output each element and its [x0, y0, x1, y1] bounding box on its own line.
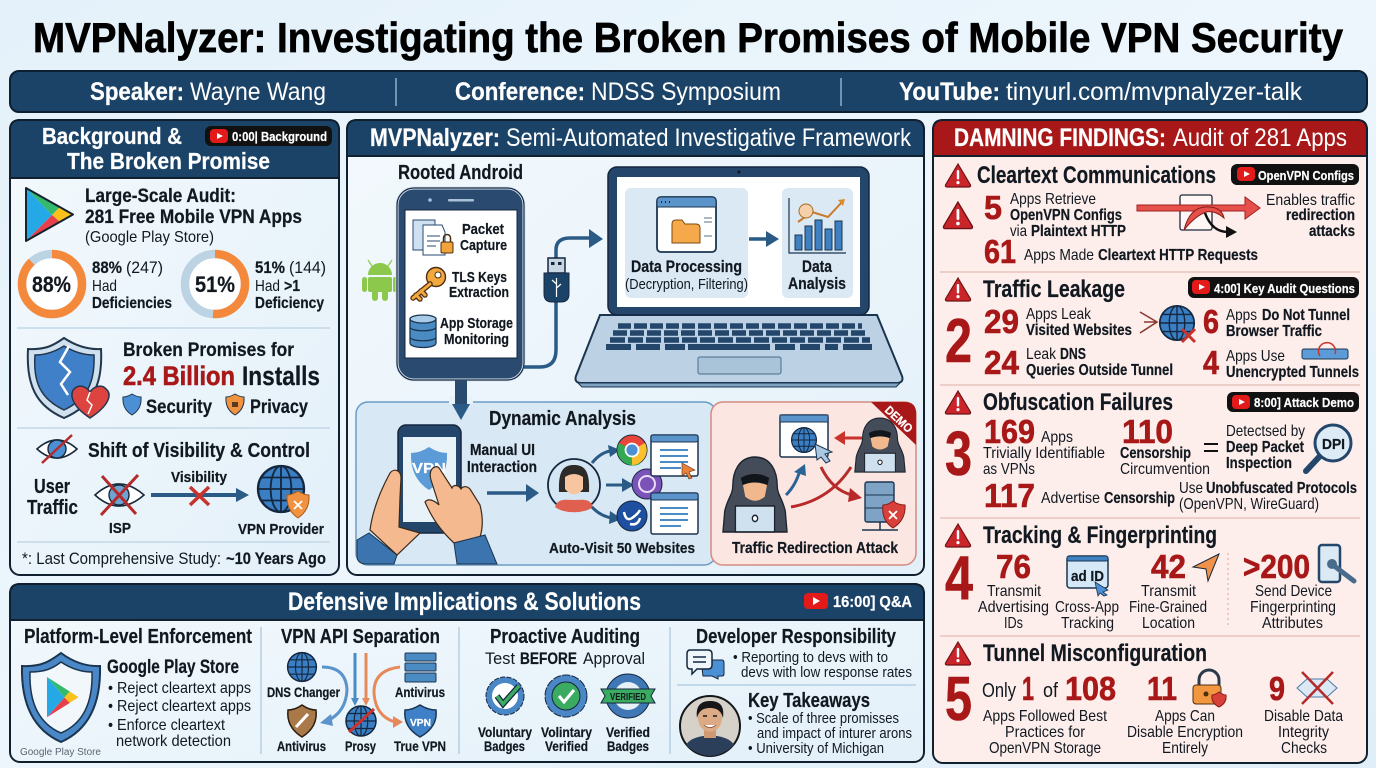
icon: crossed integrity check: [1297, 672, 1337, 704]
stat: 9 disable integrity: Disable Data: [1264, 708, 1343, 725]
bullet list: [107, 657, 251, 750]
timestamp pill: 8:00] Attack Demo: [1254, 395, 1354, 410]
talk info bar: NDSS Symposium: [591, 78, 781, 106]
text: deep packet inspection: Inspection: [1226, 455, 1292, 472]
heading: Semi-Automated Investigative Framework: [506, 124, 911, 152]
icon: warning: [945, 391, 971, 414]
icon: broken shield with heart: [28, 338, 109, 418]
video timestamp pill: 0:00| Background: [232, 129, 327, 144]
arrow: visibility blocked: Visibility: [171, 469, 228, 486]
footnote: ~10 Years Ago: [226, 550, 326, 568]
heading: [42, 123, 270, 174]
icon: ad ID: [1067, 556, 1108, 596]
stat: 11 apps: 11: [1147, 670, 1177, 707]
stat: 42 location: Fine-Grained: [1129, 599, 1207, 616]
stat: 24 DNS: DNS: [1060, 346, 1086, 363]
timestamp pill: [1231, 164, 1359, 185]
column: proactive auditing: [478, 626, 655, 754]
badge: voluntary badges: Voluntary: [478, 724, 532, 740]
timestamp: [804, 593, 912, 611]
icon: TLS key: [413, 268, 446, 299]
manual UI interaction label: Manual UI: [470, 442, 535, 459]
icon: antivirus shield brown: [277, 705, 326, 754]
stat: 9 disable integrity: [1264, 670, 1343, 757]
column heading: Platform-Level Enforcement: [24, 626, 252, 648]
icon: warning: [945, 642, 971, 665]
TLS keys label: TLS Keys: [452, 269, 507, 286]
badge: verified badges: VERIFIED: [610, 692, 646, 703]
stat: over 200 fingerprinting: >200: [1243, 548, 1310, 585]
arrow: to person: [487, 484, 539, 502]
key takeaways: • University of Michigan: [748, 741, 884, 757]
website window one: [651, 435, 698, 479]
icon: phone with wrench: [1319, 545, 1354, 582]
section: tunnel misconfiguration: [945, 640, 1343, 757]
text: unobfuscated protocols: [1179, 480, 1357, 513]
bullet list: • Enforce cleartext: [108, 717, 225, 734]
stat: 117 censorship: Advertise: [1041, 490, 1100, 507]
broken promises text: [123, 340, 320, 391]
stat: 24 DNS: Leak: [1026, 346, 1057, 363]
icon: app storage database: [410, 315, 436, 348]
stat: 110 censorship: [1120, 413, 1210, 478]
icon: warning: [945, 164, 971, 187]
stat: 61 apps: [984, 233, 1258, 270]
section: obfuscation failures: [945, 389, 1359, 514]
illustration: config interception arrow: [1137, 195, 1260, 238]
stat: 4 apps unencrypted: Apps Use: [1226, 348, 1285, 365]
stat: 117 censorship: Censorship: [1104, 490, 1175, 507]
panel: background and the broken promise: [10, 120, 339, 575]
heading: shift of visibility: Shift of Visibility & Control: [88, 440, 310, 462]
column: developer responsibility: [677, 626, 916, 757]
talk info bar: Speaker:: [90, 78, 184, 106]
stat: 51 percent more than one deficiency: Deficiency: [255, 295, 324, 312]
text: deep packet inspection: Deep Packet: [1226, 439, 1305, 456]
laptop: [576, 167, 902, 387]
icon: antivirus shield brown: Antivirus: [277, 739, 326, 754]
text: enables traffic redirection: attacks: [1309, 223, 1355, 240]
badge: voluntary verified: [541, 675, 592, 754]
talk info bar: Conference:: [455, 78, 585, 106]
stat: 1 of 108: OpenVPN Storage: [989, 740, 1101, 757]
stat: 76 advertising IDs: Advertising: [978, 599, 1049, 616]
icon: server antivirus: [395, 653, 445, 700]
stat: 76 advertising IDs: [978, 548, 1049, 632]
stat: over 200 fingerprinting: Fingerprinting: [1250, 599, 1336, 616]
cross-app tracking label: Tracking: [1061, 615, 1114, 632]
stat: 61 apps: 61: [984, 233, 1016, 270]
icon: android robot: [362, 260, 397, 301]
stat: 29 apps: Visited Websites: [1026, 322, 1132, 339]
stat: 9 disable integrity: Checks: [1281, 740, 1327, 757]
heading: Defensive Implications & Solutions: [288, 588, 641, 616]
icon: lock with shield: [1193, 670, 1226, 707]
stat: 4 apps unencrypted: 4: [1203, 344, 1220, 381]
heading: DAMNING FINDINGS:: [954, 124, 1166, 152]
column: platform-level enforcement: [20, 626, 252, 758]
badge: verified badges: Badges: [607, 738, 649, 754]
stat: 6 apps: [1203, 303, 1350, 340]
stat: 88 percent deficiencies: (247): [126, 258, 163, 277]
cross-app tracking label: [1055, 599, 1119, 632]
timestamp pill: [1227, 392, 1359, 412]
privacy label: Privacy: [250, 397, 308, 418]
bullet list: network detection: [116, 733, 231, 750]
arrows: crossed redirection: [791, 467, 862, 507]
section heading: Tracking & Fingerprinting: [983, 522, 1217, 549]
bullet list: • Reject cleartext apps: [108, 680, 251, 697]
audit text: (Google Play Store): [85, 229, 214, 246]
stat: 9 disable integrity: 9: [1269, 670, 1285, 707]
stat: 1 of 108: Only: [982, 680, 1016, 702]
auto-visit label: Auto-Visit 50 Websites: [549, 540, 695, 557]
icon: true VPN shield: VPN: [410, 718, 431, 729]
packet capture label: [460, 221, 507, 254]
stat: 5 apps: [984, 189, 1126, 240]
text: deep packet inspection: [1226, 423, 1305, 472]
stat: 117 censorship: [984, 477, 1175, 514]
icon: blue browser: [617, 501, 647, 531]
stat: 24 DNS: [984, 344, 1173, 381]
audit text: 281 Free Mobile VPN Apps: [85, 207, 302, 228]
stat: 24 DNS: 24: [984, 344, 1020, 381]
rooted android heading: Rooted Android: [398, 162, 523, 184]
section number 3: 3: [945, 420, 972, 489]
stat: 29 apps: 29: [984, 303, 1019, 340]
section: cleartext communications: [943, 162, 1359, 270]
stat: 88 percent deficiencies: Deficiencies: [92, 295, 172, 312]
timestamp: 16:00] Q&A: [833, 594, 912, 611]
stat: 1 of 108: of: [1043, 680, 1058, 702]
audit text: Large-Scale Audit:: [85, 186, 236, 207]
key takeaways: [748, 690, 912, 757]
timestamp pill: [1188, 277, 1359, 298]
video timestamp pill: [205, 126, 332, 146]
section heading: Tunnel Misconfiguration: [983, 640, 1207, 667]
illustration: hands on VPN phone: VPN: [412, 460, 446, 477]
stat: 11 apps: Apps Can: [1155, 708, 1215, 725]
badge: voluntary verified: Verified: [545, 738, 588, 754]
panel: semi-automated investigative framework: [347, 120, 924, 575]
panel: damning findings: [933, 120, 1367, 763]
stat: 169 apps: [983, 413, 1105, 478]
broken promises text: 2.4 Billion: [123, 361, 235, 391]
icon: proxy globe: Prosy: [345, 739, 376, 754]
heading: Background &: [42, 123, 182, 149]
talk info bar: YouTube:: [899, 78, 1000, 106]
heading: Dynamic Analysis: [489, 408, 636, 430]
phone: rooted android: [397, 188, 524, 380]
heading: Audit of 281 Apps: [1173, 124, 1347, 152]
stat: 42 location: Location: [1142, 615, 1195, 632]
stat: 4 apps unencrypted: [1203, 344, 1359, 381]
data processing box: (Decryption, Filtering): [625, 276, 748, 293]
stat: 5 apps: Plaintext HTTP: [1031, 223, 1126, 240]
manual UI interaction label: [467, 442, 537, 476]
heading: MVPNalyzer:: [370, 124, 500, 152]
icon: ISP eye crossed: ISP: [109, 520, 131, 537]
text: unobfuscated protocols: (OpenVPN, WireGuard): [1179, 496, 1319, 513]
arrow: USB cable to laptop: [524, 229, 603, 367]
icon: ad ID: ad ID: [1071, 568, 1104, 585]
stat: 76 advertising IDs: Transmit: [987, 583, 1041, 600]
icon: warning: [945, 524, 971, 547]
icon: crossed eye: [37, 435, 77, 463]
stat: 88 percent deficiencies: [92, 258, 172, 312]
icon: purple browser: [632, 469, 662, 499]
text: enables traffic redirection: redirection: [1286, 207, 1355, 224]
photo: speaker portrait: [680, 696, 740, 756]
heading: [954, 124, 1347, 152]
badge: verified badges: Verified: [606, 724, 650, 740]
cross-app tracking label: Cross-App: [1055, 599, 1119, 616]
attack label: Traffic Redirection Attack: [732, 540, 898, 557]
TLS keys label: Extraction: [449, 284, 509, 301]
broken promises text: Broken Promises for: [123, 340, 295, 361]
column: VPN API separation: [267, 626, 446, 754]
badge: voluntary badges: Badges: [484, 738, 525, 754]
donut chart: 88 percent: [22, 254, 82, 314]
badge: voluntary badges: [478, 677, 532, 754]
user traffic label: Traffic: [27, 497, 78, 519]
stat: 6 apps: Apps: [1226, 307, 1257, 324]
stat: 169 apps: Trivially Identifiable: [983, 445, 1105, 462]
stat: 1 of 108: 1: [1022, 670, 1034, 707]
demo ribbon: DEMO: [882, 403, 916, 436]
stat: 110 censorship: Circumvention: [1120, 461, 1210, 478]
stat: 169 apps: as VPNs: [983, 461, 1035, 478]
stat: 1 of 108: [982, 670, 1116, 757]
packet capture label: Capture: [460, 237, 507, 254]
data processing box: [625, 188, 748, 298]
stat: 29 apps: [984, 303, 1132, 340]
broken promises text: Installs: [242, 361, 320, 391]
stat: over 200 fingerprinting: Attributes: [1262, 615, 1323, 632]
section number 4: 4: [945, 544, 973, 613]
icon: DPI magnifier: DPI: [1322, 436, 1345, 453]
icon: person: [548, 459, 600, 512]
reporting text: • Reporting to devs with to: [733, 650, 888, 666]
arrow: visibility blocked: [151, 469, 249, 505]
bullet list: • Reject cleartext apps: [108, 698, 251, 715]
column heading: VPN API Separation: [281, 626, 440, 648]
stat: 51 percent more than one deficiency: [255, 258, 326, 312]
column heading: [485, 626, 645, 668]
icon: warning large: [943, 202, 972, 229]
talk info bar: tinyurl.com/mvpnalyzer-talk: [1006, 78, 1302, 106]
text: enables traffic redirection: [1266, 192, 1355, 240]
icon: VPN provider globe: VPN Provider: [238, 521, 324, 538]
packet capture label: Packet: [462, 221, 504, 238]
user traffic label: [27, 476, 78, 519]
donut chart: 88 percent: 88%: [32, 272, 71, 297]
stat: 1 of 108: Apps Followed Best: [983, 708, 1107, 725]
heading: [370, 124, 911, 152]
equals sign: [1204, 444, 1218, 451]
icon: chat bubbles: [687, 650, 724, 679]
text: unobfuscated protocols: Use: [1179, 480, 1203, 497]
app storage label: [440, 315, 513, 348]
stat: over 200 fingerprinting: Send Device: [1255, 583, 1332, 600]
section: traffic leakage: [945, 276, 1359, 381]
stat: 110 censorship: 110: [1122, 413, 1173, 450]
talk info bar: [10, 71, 1367, 112]
stat: 5 apps: OpenVPN Configs: [1010, 207, 1122, 224]
section number 2: 2: [945, 307, 972, 376]
user traffic label: User: [34, 476, 70, 498]
privacy label: [226, 394, 308, 418]
heading: The Broken Promise: [67, 148, 270, 174]
stat: 29 apps: Apps Leak: [1026, 306, 1092, 323]
icon: DNS changer globe: [267, 653, 341, 700]
column heading: BEFORE: [520, 649, 577, 668]
stat: 1 of 108: Practices for: [1005, 724, 1086, 741]
arrows: API separation flows: [320, 653, 403, 728]
stat: 169 apps: Apps: [1041, 429, 1073, 446]
key takeaways: Key Takeaways: [748, 690, 870, 712]
stat: 5 apps: 5: [984, 189, 1002, 226]
data processing box: Data Processing: [631, 257, 742, 276]
icon: DPI magnifier: [1306, 425, 1351, 471]
website window with globe: [780, 415, 832, 463]
panel: dynamic analysis: [356, 380, 716, 565]
icon: leaking globe: [1140, 306, 1195, 342]
text: enables traffic redirection: Enables traffic: [1266, 192, 1355, 209]
icon: VPN provider globe: [238, 466, 324, 538]
arrows: person to websites: [592, 445, 634, 524]
stat: 51 percent more than one deficiency: (144): [289, 258, 326, 277]
icon: DNS changer globe: DNS Changer: [267, 685, 341, 700]
stat: 76 advertising IDs: IDs: [1004, 615, 1023, 632]
icon: chrome browser: [617, 435, 647, 465]
icon: google play: [26, 188, 73, 241]
stat: 110 censorship: Censorship: [1120, 445, 1191, 462]
arrow: attacker to website: [834, 431, 862, 445]
stat: 6 apps: Do Not Tunnel: [1262, 307, 1350, 324]
badge: verified badges: [601, 674, 655, 754]
stat: 51 percent more than one deficiency: >1: [284, 278, 300, 295]
stat: 117 censorship: 117: [984, 477, 1035, 514]
bullet list: Google Play Store: [107, 657, 239, 678]
icon: warning: [945, 278, 971, 301]
icon: attacker left: [723, 457, 787, 532]
reporting text: devs with low response rates: [741, 665, 912, 681]
timestamp pill: 4:00] Key Audit Questions: [1214, 281, 1355, 296]
stat: over 200 fingerprinting: [1243, 548, 1336, 632]
column heading: Developer Responsibility: [696, 626, 897, 648]
illustration: hands on VPN phone: [357, 425, 497, 564]
arrow: attacker up to website: [786, 464, 806, 495]
panel: defensive implications and solutions: [10, 584, 924, 762]
section heading: Cleartext Communications: [977, 162, 1216, 189]
icon: server antivirus: Antivirus: [395, 685, 445, 700]
stat: 169 apps: 169: [984, 413, 1035, 450]
footnote: *: Last Comprehensive Study:: [22, 550, 221, 568]
icon: server with shield: [862, 482, 905, 530]
arrow: phone to dynamic analysis: [449, 380, 473, 420]
stat: 88 percent deficiencies: Had: [92, 278, 117, 295]
reporting text: [733, 650, 912, 681]
demo ribbon: [871, 402, 916, 445]
stat: 42 location: [1129, 548, 1219, 632]
stat: 76 advertising IDs: 76: [996, 548, 1031, 585]
text: deep packet inspection: Detectsed by: [1226, 423, 1305, 440]
security label: Security: [146, 397, 212, 418]
icon: shield with play logo: [22, 653, 100, 742]
stat: 42 location: 42: [1151, 548, 1186, 585]
audit text: [85, 186, 302, 246]
stat: 24 DNS: Queries Outside Tunnel: [1026, 362, 1173, 379]
timestamp pill: OpenVPN Configs: [1258, 168, 1354, 183]
TLS keys label: [449, 269, 509, 301]
talk info bar: Wayne Wang: [190, 78, 326, 106]
stat: 61 apps: Apps Made: [1024, 247, 1094, 264]
stat: 61 apps: Cleartext HTTP Requests: [1098, 247, 1258, 264]
stat: 5 apps: Apps Retrieve: [1010, 191, 1096, 208]
stat: 51 percent more than one deficiency: Had: [255, 278, 280, 295]
stat: 6 apps: Browser Traffic: [1226, 323, 1322, 340]
section number 5: 5: [945, 665, 972, 734]
icon: broken tunnel: [1302, 343, 1348, 359]
data analysis box: Data: [802, 257, 832, 276]
caption: google play store: Google Play Store: [20, 747, 101, 758]
stat: 42 location: Transmit: [1141, 583, 1196, 600]
stat: 51 percent more than one deficiency: 51%: [255, 258, 285, 277]
key takeaways: and impact of inturer arons: [757, 726, 912, 742]
panel: traffic redirection attack demo: [711, 402, 916, 565]
stat: 88 percent deficiencies: 88%: [92, 258, 122, 277]
security label: [123, 394, 212, 418]
column heading: Proactive Auditing: [490, 626, 640, 648]
section heading: Obfuscation Failures: [983, 389, 1173, 416]
manual UI interaction label: Interaction: [467, 459, 537, 476]
section heading: Traffic Leakage: [983, 276, 1125, 303]
stat: 9 disable integrity: Integrity: [1278, 724, 1329, 741]
app storage label: Monitoring: [444, 331, 509, 348]
data analysis box: [782, 188, 853, 298]
icon: true VPN shield: True VPN: [394, 739, 446, 754]
icon: attacker right: [855, 418, 905, 472]
stat: 1 of 108: 108: [1065, 670, 1116, 707]
icon: ISP eye crossed: [95, 475, 144, 537]
donut chart: 51 percent: [185, 254, 245, 314]
section: tracking and fingerprinting: [945, 522, 1354, 632]
icon: packet capture documents: [413, 220, 453, 255]
stat: 5 apps: via: [1010, 223, 1027, 240]
key takeaways: • Scale of three promisses: [748, 711, 899, 727]
app storage label: App Storage: [440, 315, 513, 332]
data analysis box: Analysis: [788, 274, 846, 293]
stat: 11 apps: Entirely: [1162, 740, 1208, 757]
column heading: Test: [485, 649, 515, 668]
stat: 6 apps: 6: [1203, 303, 1219, 340]
website window two: [651, 493, 698, 534]
icon: true VPN shield: [394, 705, 446, 754]
stat: 11 apps: [1127, 670, 1243, 757]
icon: proxy globe: [345, 706, 376, 754]
arrow: processing to analysis: [749, 231, 779, 247]
badge: voluntary verified: Volintary: [541, 724, 592, 740]
donut chart: 51 percent: 51%: [195, 272, 235, 297]
stat: 11 apps: Disable Encryption: [1127, 724, 1243, 741]
column heading: Approval: [583, 649, 645, 668]
